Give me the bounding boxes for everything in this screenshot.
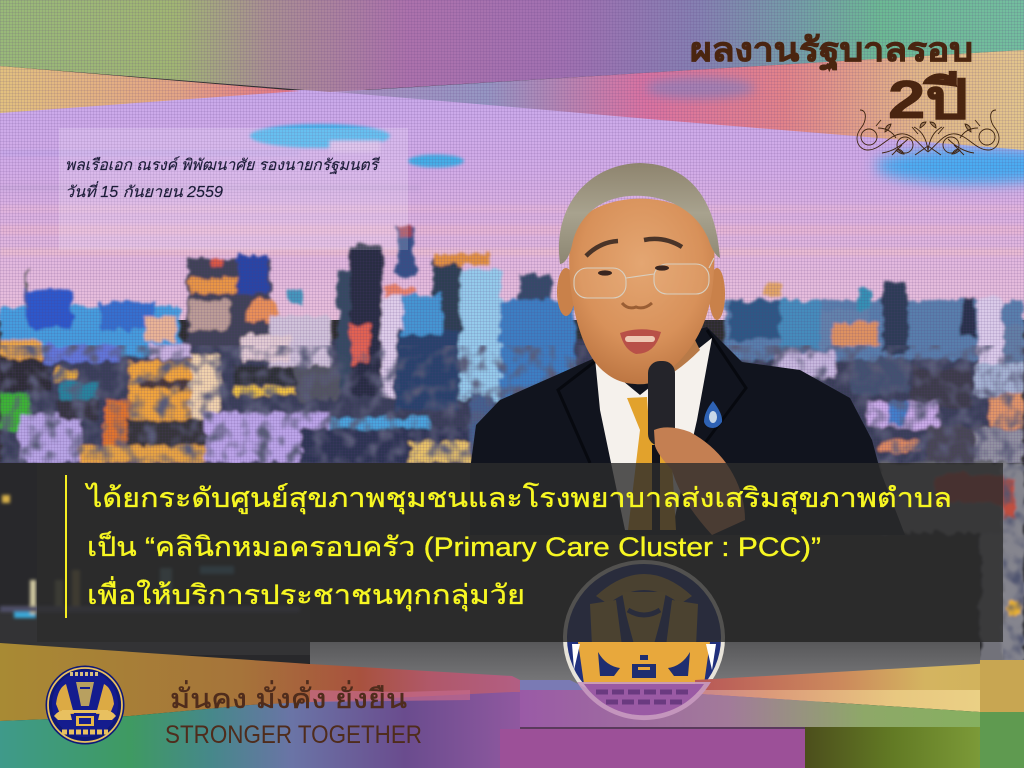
- accent line: [65, 475, 67, 618]
- main message text: เพื่อให้บริการประชาชนทุกกลุ่มวัย: [87, 576, 525, 612]
- tie: [627, 397, 676, 530]
- suit: [470, 327, 905, 535]
- main message text: ได้ยกระดับศูนย์สุขภาพชุมชนและโรงพยาบาลส่งเสริมสุขภาพตำบล: [85, 482, 952, 515]
- background: lower city on right edge: [880, 463, 1024, 668]
- laurel: [596, 574, 692, 604]
- background: LED screen sky: [0, 90, 1024, 320]
- background: top colour band: [0, 0, 1024, 150]
- microphone: [648, 361, 675, 446]
- background: sky streaks: [0, 150, 1024, 256]
- eyebrows: [586, 239, 682, 256]
- shirt: [595, 338, 712, 530]
- translucent box behind speaker caption: [59, 128, 408, 250]
- mouth: [620, 329, 661, 354]
- lapels: [558, 330, 746, 463]
- lapel pin: [704, 401, 722, 428]
- podium: [310, 642, 980, 702]
- speaker caption: [65, 156, 380, 201]
- background: blue clouds: [250, 124, 464, 168]
- texture: LED dot grid over screen: [0, 0, 1024, 463]
- slogan: English: STRONGER TOGETHER: [165, 721, 422, 749]
- ears: [557, 268, 575, 316]
- glasses: [574, 258, 714, 298]
- texture: city dark speckle: [0, 345, 1024, 463]
- face: [569, 199, 714, 384]
- lions: [590, 600, 698, 646]
- dark text panel: [37, 463, 1003, 642]
- emblem lower edge over ribbons: [577, 682, 711, 720]
- icon: ornament flourish: [857, 110, 999, 155]
- lower figures: [578, 642, 710, 684]
- emblem on podium: [563, 560, 725, 716]
- hand: [654, 427, 745, 535]
- eyes: [598, 270, 612, 276]
- speaker photo: [470, 163, 905, 535]
- background: right blue haze: [875, 148, 1024, 184]
- title number: 2 years: 2ปี: [888, 70, 968, 130]
- main message text: [85, 482, 952, 612]
- dark backdrop below the city: [0, 463, 1024, 663]
- logo: government seal: [46, 666, 124, 744]
- texture: right edge speckle: [1003, 463, 1024, 663]
- title: ผลงานรัฐบาลรอบ: [690, 31, 973, 71]
- speaker caption: พลเรือเอก ณรงค์ พิพัฒนาศัย รองนายกรัฐมนตรี: [65, 156, 380, 175]
- nose: [622, 303, 652, 308]
- slogan: Thai: มั่นคง มั่งคั่ง ยั่งยืน: [170, 680, 407, 714]
- speaker caption: วันที่ 15 กันยายน 2559: [65, 181, 223, 201]
- main message text: เป็น “คลินิกหมอครอบครัว (Primary Care Cluster : PCC)”: [87, 529, 821, 562]
- hair: [559, 163, 720, 264]
- background: city skyline: [0, 226, 1024, 470]
- neck shadow: [606, 340, 700, 384]
- bottom coloured ribbons: [0, 643, 1024, 768]
- vessel: [622, 592, 666, 644]
